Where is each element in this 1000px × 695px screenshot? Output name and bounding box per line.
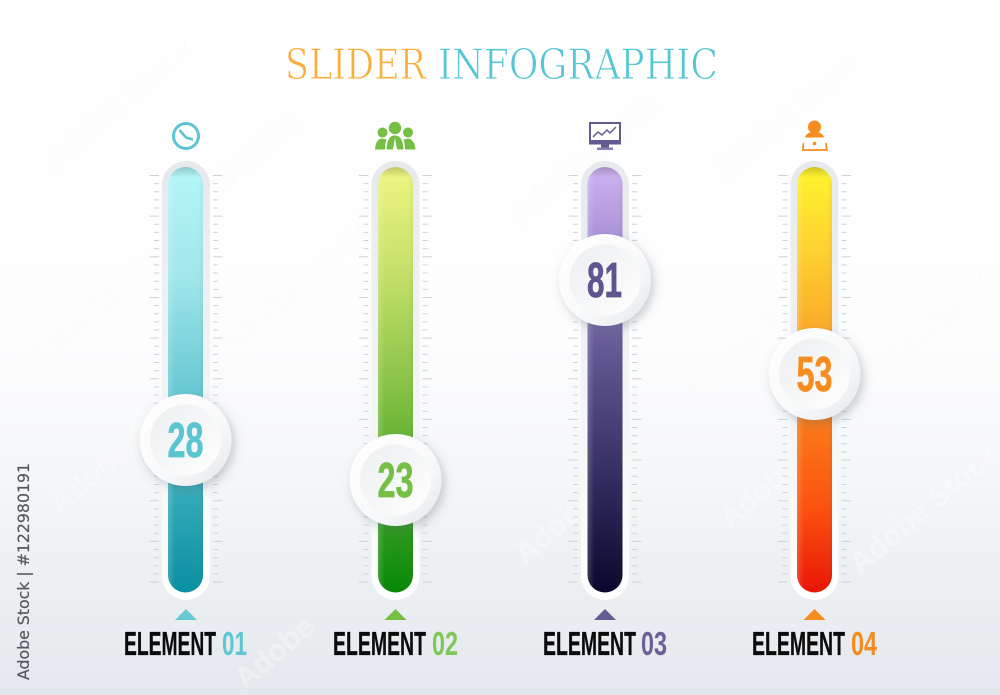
pointer triangle bbox=[384, 609, 406, 620]
scale ticks bbox=[780, 175, 848, 584]
icon: clock bbox=[174, 124, 198, 148]
panel: slider 2 bbox=[333, 122, 458, 662]
watermark pattern: Adobe Stock bbox=[38, 32, 200, 175]
knob with value 81 bbox=[559, 234, 651, 326]
knob with value 23 bbox=[350, 434, 442, 526]
knob with value 53 bbox=[768, 328, 860, 420]
scale ticks bbox=[571, 175, 639, 584]
knob with value 28 bbox=[140, 394, 232, 486]
track bbox=[372, 161, 420, 600]
title: SLIDER bbox=[285, 40, 427, 89]
watermark pattern: Adobe Stock bbox=[43, 377, 205, 520]
track bbox=[790, 161, 838, 600]
knob with value 23: 23 bbox=[378, 454, 414, 508]
watermark pattern: Adobe Stock bbox=[673, 267, 835, 410]
track bbox=[581, 161, 629, 600]
panel: slider 3 bbox=[543, 123, 667, 662]
label: element 03: ELEMENT bbox=[543, 625, 636, 662]
panel: slider 1 bbox=[124, 124, 247, 662]
pointer triangle bbox=[804, 609, 826, 620]
panel: slider 4 bbox=[752, 120, 877, 662]
watermark pattern: Adobe Stock bbox=[508, 427, 670, 570]
knob with value 28: 28 bbox=[168, 414, 204, 468]
stock credit: Adobe Stock | #122980191 bbox=[14, 463, 33, 680]
watermark pattern: Adobe Stock bbox=[708, 42, 870, 185]
label: element 02: 02 bbox=[432, 625, 458, 662]
watermark pattern: Adobe Stock bbox=[213, 217, 375, 360]
label: element 04: 04 bbox=[851, 625, 877, 662]
scale ticks bbox=[152, 175, 220, 584]
title: INFOGRAPHIC bbox=[438, 40, 718, 89]
watermark pattern: Adobe Stock bbox=[503, 87, 665, 230]
icon: monitor bbox=[589, 123, 621, 150]
label: element 04: ELEMENT bbox=[752, 625, 845, 662]
icon: people bbox=[375, 122, 416, 150]
watermark pattern: Adobe bbox=[228, 610, 321, 695]
label: element 01: ELEMENT bbox=[124, 625, 216, 662]
knob with value 81: 81 bbox=[587, 254, 622, 308]
label: element 02: ELEMENT bbox=[333, 625, 426, 662]
label: element 03: 03 bbox=[641, 625, 667, 662]
knob with value 53: 53 bbox=[796, 348, 832, 402]
icon: person at laptop bbox=[803, 120, 827, 150]
watermark pattern: Adobe bbox=[213, 105, 306, 190]
watermark pattern: Adobe Stock bbox=[3, 247, 165, 390]
pointer triangle bbox=[175, 609, 197, 620]
pointer triangle bbox=[594, 609, 616, 620]
scale ticks bbox=[362, 175, 430, 584]
label: element 01: 01 bbox=[222, 625, 247, 662]
watermark pattern: Adobe Stock bbox=[713, 392, 875, 535]
title bbox=[285, 40, 718, 89]
track bbox=[162, 161, 210, 600]
